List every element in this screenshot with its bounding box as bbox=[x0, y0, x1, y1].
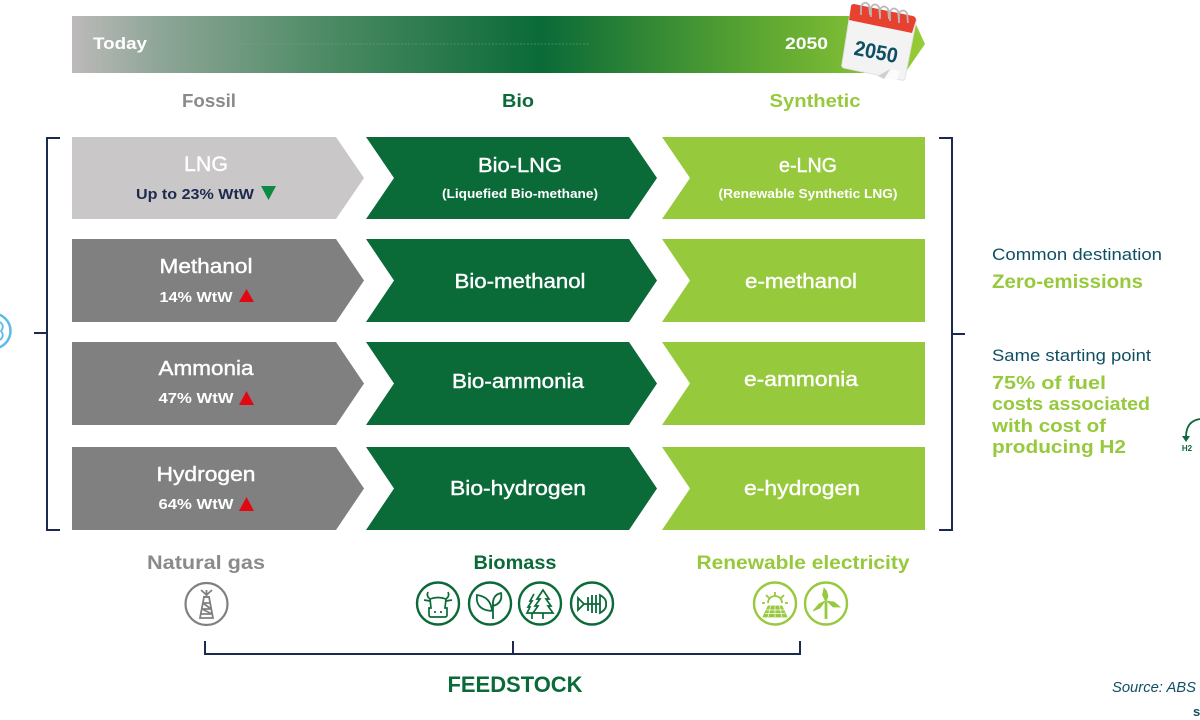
chevron: Bio-ammonia: Bio-ammonia bbox=[452, 371, 585, 393]
chevron: Bio-hydrogen: Bio-hydrogen bbox=[450, 478, 586, 500]
chevron: Ammonia fossil: 47% WtW bbox=[158, 390, 234, 407]
icon: oil rig bbox=[186, 583, 228, 625]
chevron: e-ammonia: e-ammonia bbox=[744, 369, 859, 391]
chevron: Hydrogen fossil bbox=[72, 447, 364, 530]
chevron: Hydrogen fossil: Hydrogen bbox=[156, 464, 256, 486]
icon: calendar 2050 bbox=[842, 3, 916, 80]
callout: same starting point: 75% of fuel bbox=[992, 373, 1106, 393]
timeline label: 2050: 2050 bbox=[785, 34, 828, 53]
chevron: e-LNG: e-LNG bbox=[779, 155, 837, 177]
icon: partial circle at left edge bbox=[0, 314, 10, 348]
icon: fish bone bbox=[571, 582, 613, 624]
heading: bio: Bio bbox=[502, 91, 534, 111]
chevron: LNG fossil bbox=[72, 137, 364, 219]
chevron: Bio-LNG bbox=[366, 137, 657, 219]
callout: common destination: Common destination bbox=[992, 245, 1162, 264]
callout: same starting point bbox=[991, 346, 1151, 457]
icon: pine trees bbox=[519, 582, 561, 624]
chevron: Ammonia fossil bbox=[72, 342, 364, 425]
callout: same starting point: producing H2 bbox=[992, 437, 1126, 457]
source note: Source: ABS bbox=[1112, 679, 1196, 696]
chevron: e-LNG bbox=[662, 137, 925, 219]
chevron: Bio-LNG: (Liquefied Bio-methane) bbox=[442, 186, 598, 201]
timeline label: today: Today bbox=[93, 34, 148, 53]
chevron: Hydrogen fossil: 64% WtW bbox=[158, 496, 234, 513]
icon: wind turbine bbox=[805, 582, 847, 624]
icon: H2 cycle arrow bbox=[1182, 419, 1200, 453]
chevron: Bio-hydrogen bbox=[366, 447, 657, 530]
icon: leaf plant bbox=[469, 582, 511, 624]
chevron: Methanol fossil: Methanol bbox=[160, 256, 252, 278]
chevron: e-methanol bbox=[662, 239, 925, 322]
callout: same starting point: costs associated bbox=[992, 394, 1150, 414]
row: ammonia bbox=[72, 342, 925, 425]
calendar year text: 2050 bbox=[852, 37, 900, 68]
chevron: LNG fossil: Up to 23% WtW bbox=[136, 186, 255, 203]
chevron: e-hydrogen bbox=[662, 447, 925, 530]
left bracket bbox=[34, 138, 60, 530]
row: methanol bbox=[72, 239, 925, 322]
icon: H2 cycle arrow: H2 bbox=[1182, 444, 1193, 453]
chevron: e-LNG: (Renewable Synthetic LNG) bbox=[718, 186, 898, 201]
icon: solar panel bbox=[754, 582, 796, 624]
row: hydrogen bbox=[72, 447, 925, 530]
feedstock label: biomass: Biomass bbox=[474, 553, 556, 574]
feedstock label: renewable electricity: Renewable electricity bbox=[696, 553, 910, 574]
chevron: Methanol fossil: 14% WtW bbox=[160, 289, 233, 306]
chevron: e-hydrogen: e-hydrogen bbox=[744, 478, 860, 500]
icon: cow bbox=[417, 582, 459, 624]
label: feedstock: FEEDSTOCK bbox=[448, 672, 583, 697]
timeline arrow bbox=[72, 16, 925, 73]
chevron: e-ammonia bbox=[662, 342, 925, 425]
heading: fossil: Fossil bbox=[182, 91, 236, 111]
chevron: e-methanol: e-methanol bbox=[745, 271, 857, 293]
chevron: Bio-ammonia bbox=[366, 342, 657, 425]
callout: same starting point: with cost of bbox=[991, 416, 1107, 436]
row: LNG bbox=[72, 137, 925, 219]
feedstock bracket bbox=[205, 641, 800, 654]
callout: common destination: Zero-emissions bbox=[992, 272, 1143, 293]
feedstock label: natural gas: Natural gas bbox=[147, 553, 265, 574]
chevron: Bio-methanol bbox=[366, 239, 657, 322]
chevron: Ammonia fossil: Ammonia bbox=[158, 358, 254, 380]
heading: synthetic: Synthetic bbox=[770, 91, 860, 111]
chevron: Bio-methanol: Bio-methanol bbox=[454, 271, 586, 293]
chevron: Bio-LNG: Bio-LNG bbox=[478, 155, 562, 177]
right bracket bbox=[939, 138, 965, 530]
chevron: Methanol fossil bbox=[72, 239, 364, 322]
callout: common destination bbox=[992, 245, 1162, 293]
chevron: LNG fossil: LNG bbox=[184, 153, 228, 176]
callout: same starting point: Same starting point bbox=[992, 346, 1151, 365]
